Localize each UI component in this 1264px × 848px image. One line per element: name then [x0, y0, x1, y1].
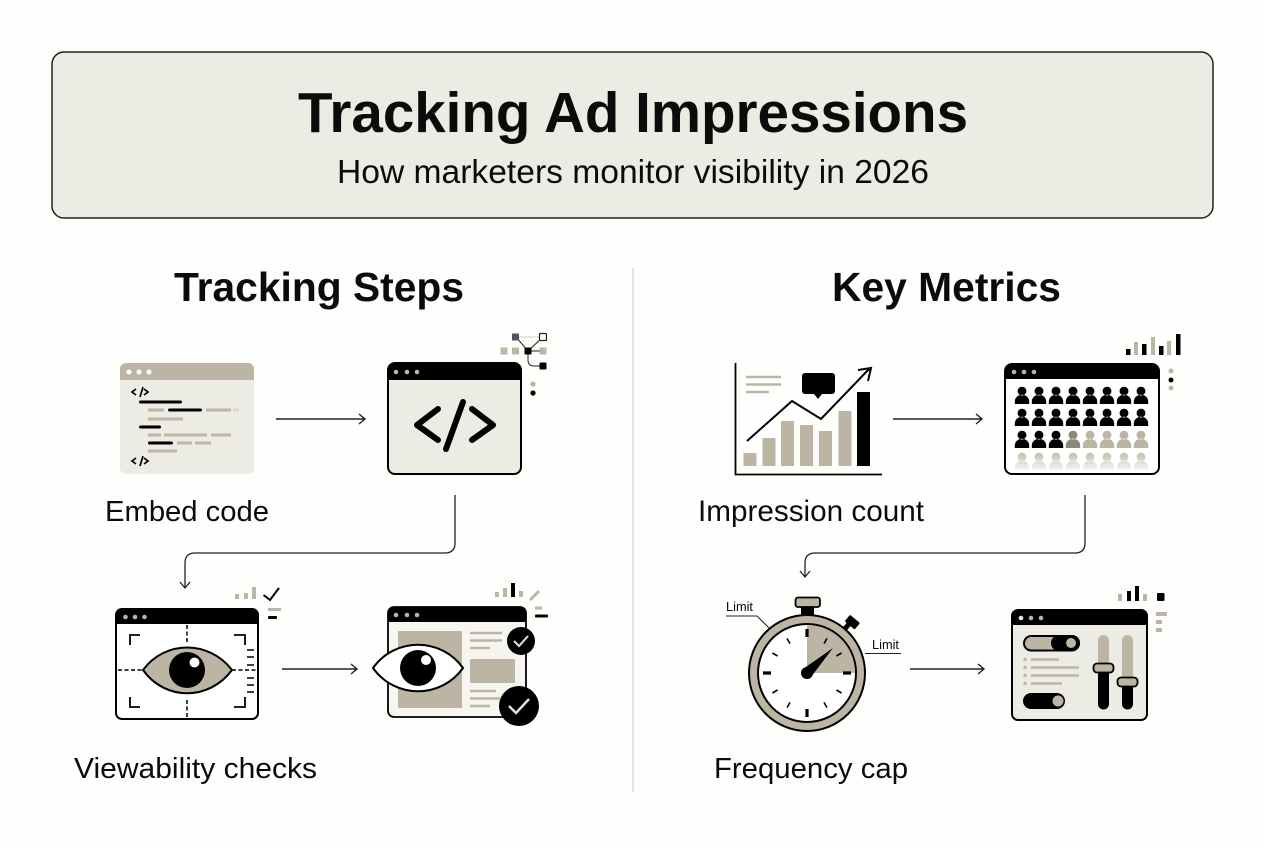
icon: settings window [1012, 586, 1167, 720]
icon: network nodes [500, 334, 546, 396]
icon: embed code document [120, 363, 254, 474]
heading: tracking steps: Tracking Steps [174, 264, 464, 310]
limit label left [726, 599, 769, 628]
chart: impressions growth [736, 363, 882, 474]
label: impression count: Impression count [698, 495, 924, 528]
audience rows [1012, 387, 1152, 473]
label: viewability checks: Viewability checks [74, 753, 317, 785]
divider [632, 268, 634, 792]
panel: key metrics [698, 264, 1180, 785]
sliders [1094, 635, 1138, 710]
connector: code to viewability [180, 495, 455, 588]
label: frequency cap: Frequency cap [714, 753, 908, 785]
arrow: chart to audience [893, 414, 982, 424]
arrow: target to verified [282, 664, 357, 674]
toggle on [1024, 635, 1080, 651]
limit label left: Limit [726, 599, 753, 614]
panel: tracking steps [74, 264, 548, 785]
title: Tracking Ad Impressions [298, 81, 968, 145]
limit label right [865, 637, 901, 654]
icon: stopwatch [726, 598, 901, 731]
icon: code window [388, 363, 521, 474]
icon: verified ad page [373, 583, 548, 726]
toggle off [1023, 693, 1065, 709]
header panel [52, 52, 1213, 218]
label: embed code: Embed code [105, 496, 269, 528]
connector: audience to frequency [800, 495, 1085, 577]
arrow: stopwatch to settings [910, 664, 984, 674]
arrow: embed to script [276, 414, 365, 424]
subtitle: How marketers monitor visibility in 2026 [337, 153, 929, 190]
limit label right: Limit [872, 637, 899, 652]
icon: audience window [1005, 334, 1180, 474]
heading: key metrics: Key Metrics [832, 264, 1061, 310]
icon: viewability target window [116, 587, 281, 719]
